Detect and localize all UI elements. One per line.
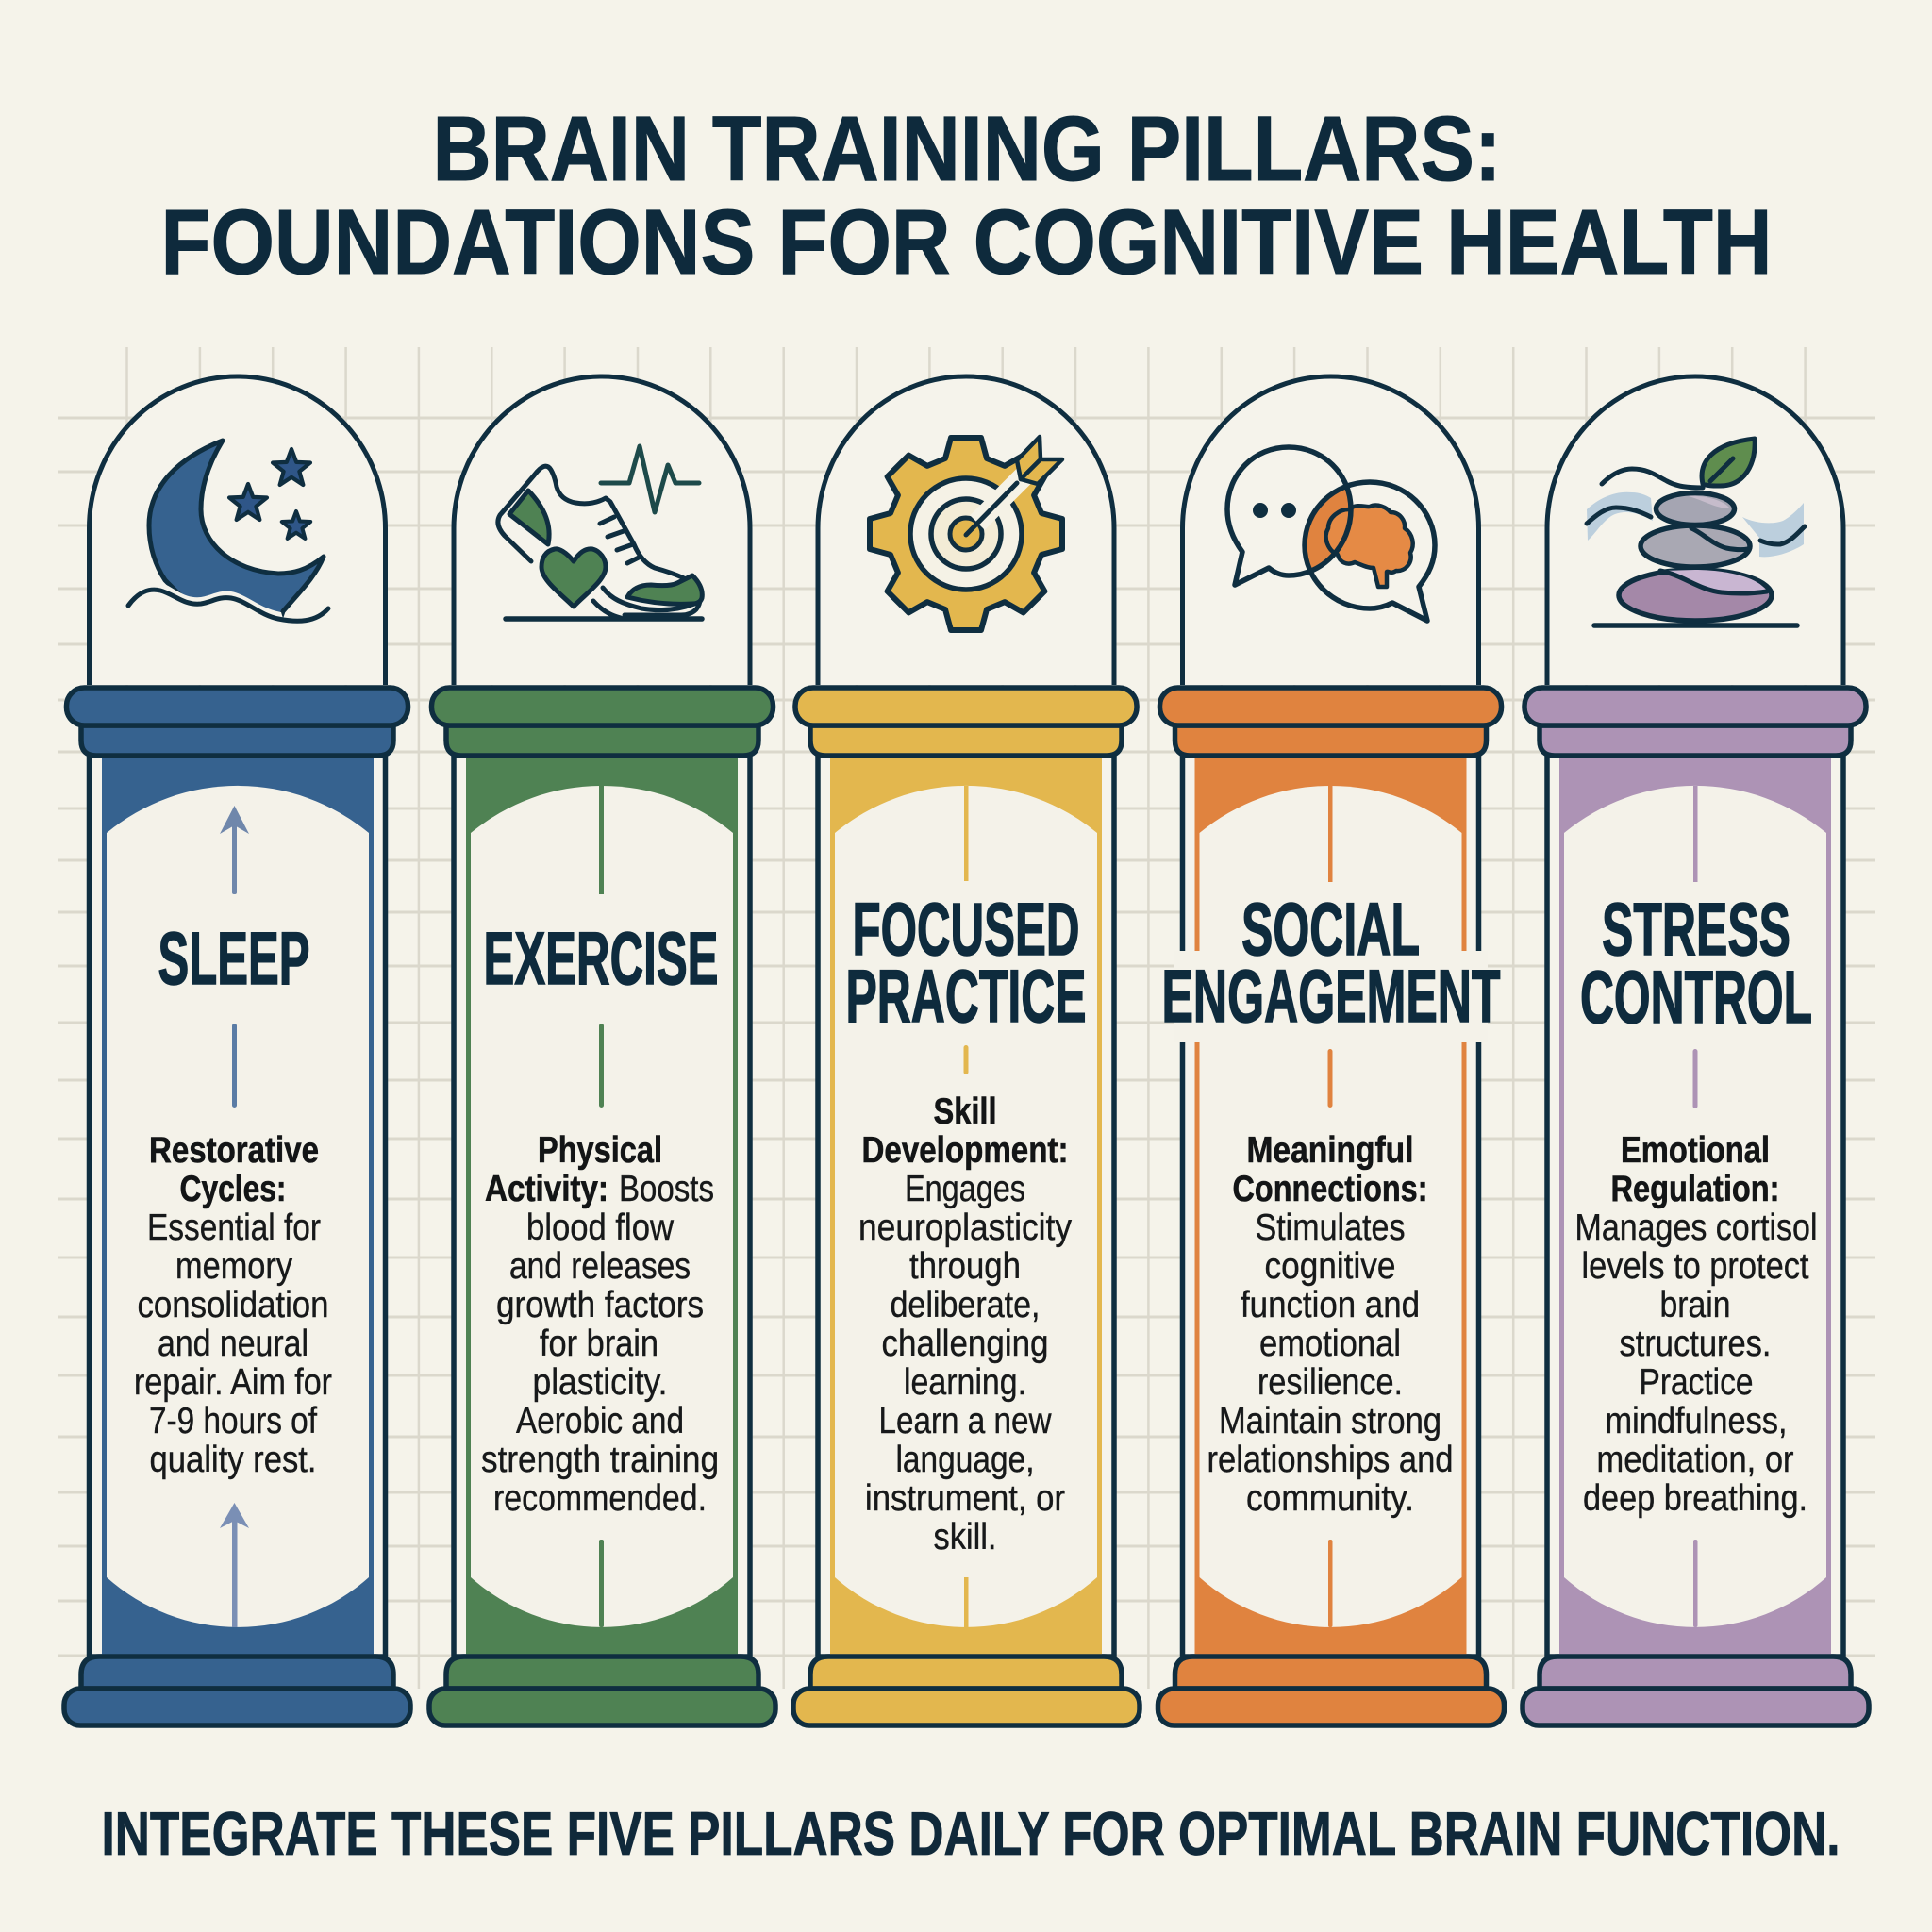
description: growth factors [496, 1285, 704, 1325]
pillar: focused practice [793, 376, 1140, 1725]
description: repair. Aim for [134, 1362, 332, 1403]
title: FOUNDATIONS FOR COGNITIVE HEALTH [160, 191, 1772, 293]
capital upper [432, 688, 774, 725]
divider line [964, 1045, 968, 1074]
description: Stimulates [1255, 1208, 1406, 1248]
dome [1547, 376, 1843, 685]
description: Skill [934, 1091, 996, 1132]
pillar: social engagement [1158, 376, 1504, 1725]
description: and neural [158, 1324, 308, 1364]
base lower [429, 1689, 775, 1725]
divider line [599, 1024, 604, 1108]
description: deliberate, [891, 1285, 1040, 1325]
pillar: sleep [64, 376, 410, 1725]
base upper [81, 1657, 393, 1689]
shaft [89, 755, 385, 1657]
description: through [909, 1246, 1021, 1287]
description: Cycles: [179, 1169, 287, 1209]
description: deep breathing. [1583, 1478, 1807, 1519]
base lower [64, 1689, 410, 1725]
capital lower [810, 725, 1122, 756]
dome [818, 376, 1114, 685]
description: instrument, or [865, 1478, 1065, 1519]
divider line [1328, 1049, 1332, 1108]
dome [89, 376, 385, 685]
description: quality rest. [149, 1440, 317, 1480]
description [1208, 1130, 1453, 1519]
text panel [471, 786, 733, 1627]
description: community. [1246, 1478, 1414, 1519]
capital upper [1160, 688, 1502, 725]
base upper [446, 1657, 758, 1689]
description: relationships and [1208, 1440, 1453, 1480]
top line [599, 786, 604, 894]
heading: SLEEP [158, 916, 309, 1000]
description: brain [1660, 1285, 1730, 1325]
description [481, 1130, 719, 1519]
colour band [1194, 758, 1466, 1655]
description: Activity: [485, 1169, 608, 1209]
description: emotional [1259, 1324, 1401, 1364]
description: function and [1241, 1285, 1420, 1325]
top arrow [220, 806, 249, 894]
description: resilience. [1257, 1362, 1403, 1403]
divider line [1692, 1049, 1698, 1108]
description: 7-9 hours of [149, 1401, 317, 1441]
dome [1183, 376, 1479, 685]
icon: speech bubbles and brain [1227, 447, 1435, 621]
description: Emotional [1621, 1130, 1770, 1171]
capital lower [1540, 725, 1851, 756]
description: challenging [881, 1324, 1049, 1364]
description: recommended. [493, 1478, 707, 1519]
capital lower [1175, 725, 1487, 756]
base upper [1175, 1657, 1487, 1689]
heading [845, 887, 1087, 1038]
top line [1693, 786, 1698, 882]
description: Engages [905, 1169, 1025, 1209]
heading: FOCUSED [853, 887, 1079, 971]
capital upper [795, 688, 1137, 725]
base lower [1523, 1689, 1869, 1725]
colour band [830, 758, 1102, 1655]
heading: STRESS [1602, 887, 1790, 971]
bottom arrow [220, 1503, 249, 1627]
description: plasticity. [532, 1362, 668, 1403]
description: Boosts [619, 1169, 714, 1209]
shaft [1183, 755, 1479, 1657]
description: Meaningful [1247, 1130, 1413, 1171]
top line [1328, 786, 1332, 882]
description: Manages cortisol [1575, 1208, 1817, 1248]
description: meditation, or [1596, 1440, 1794, 1480]
description: Connections: [1232, 1169, 1428, 1209]
description: Practice [1640, 1362, 1753, 1403]
top line [964, 786, 968, 881]
shaft [454, 755, 750, 1657]
description: consolidation [138, 1285, 328, 1325]
heading: ENGAGEMENT [1162, 954, 1500, 1038]
description: Learn a new [879, 1401, 1052, 1441]
description: Physical [538, 1130, 662, 1171]
text panel [1200, 786, 1462, 1627]
base upper [1540, 1657, 1851, 1689]
divider line [232, 1024, 237, 1108]
description: mindfulness, [1606, 1401, 1787, 1441]
capital lower [81, 725, 393, 756]
description: Maintain strong [1219, 1401, 1441, 1441]
heading: PRACTICE [845, 954, 1087, 1038]
title [160, 97, 1772, 293]
pillar: exercise [429, 376, 775, 1725]
icon: stacked stones, leaf and wind [1587, 439, 1805, 625]
capital upper [1524, 688, 1866, 725]
icon: running shoe, heart and pulse [498, 446, 702, 619]
base lower [1158, 1689, 1504, 1725]
dome [454, 376, 750, 685]
bottom line [599, 1540, 604, 1627]
icon: moon and stars [128, 441, 328, 634]
text panel [1564, 786, 1826, 1627]
shaft [1547, 755, 1843, 1657]
text panel [107, 786, 369, 1627]
bottom line [964, 1577, 968, 1627]
heading [1580, 887, 1812, 1039]
description [858, 1091, 1072, 1557]
description: learning. [904, 1362, 1026, 1403]
capital upper [66, 688, 408, 725]
description: for brain [540, 1324, 658, 1364]
description: cognitive [1264, 1246, 1396, 1287]
description: Regulation: [1611, 1169, 1779, 1209]
heading: SOCIAL [1241, 887, 1420, 971]
description: neuroplasticity [858, 1208, 1072, 1248]
description: and releases [509, 1246, 691, 1287]
description: language, [896, 1440, 1034, 1480]
bottom line [1328, 1540, 1332, 1627]
shaft [818, 755, 1114, 1657]
base upper [810, 1657, 1122, 1689]
colour band [1559, 758, 1831, 1655]
title: BRAIN TRAINING PILLARS: [432, 97, 1502, 200]
description: levels to protect [1581, 1246, 1809, 1287]
description: skill. [934, 1517, 996, 1557]
description [1575, 1130, 1817, 1519]
description: structures. [1619, 1324, 1772, 1364]
heading backing [1174, 951, 1488, 1042]
icon: gear with target and arrow [870, 437, 1062, 630]
capital lower [446, 725, 758, 756]
description: strength training [481, 1440, 719, 1480]
bottom line [1693, 1540, 1698, 1627]
description: Essential for [147, 1208, 321, 1248]
colour band [466, 758, 738, 1655]
heading [1162, 887, 1500, 1038]
description: memory [175, 1246, 292, 1287]
description [134, 1130, 332, 1480]
description: Aerobic and [516, 1401, 684, 1441]
heading: EXERCISE [483, 916, 719, 1000]
pillar: stress control [1523, 376, 1869, 1725]
colour band [102, 758, 374, 1655]
description: blood flow [526, 1208, 675, 1248]
text panel [835, 786, 1097, 1627]
description: Development: [862, 1130, 1068, 1171]
base lower [793, 1689, 1140, 1725]
description: Restorative [149, 1130, 319, 1171]
